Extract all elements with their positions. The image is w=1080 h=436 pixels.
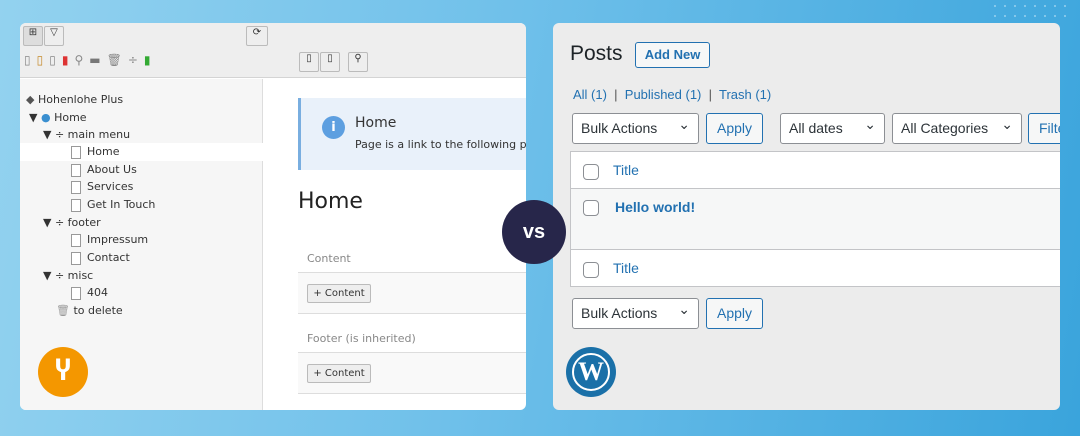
toolbar: ▯ xyxy=(327,53,333,64)
panel: TYPO3: Content xyxy=(307,252,351,265)
posts table xyxy=(570,151,1070,287)
panel: WordPress: All Categories xyxy=(901,120,988,136)
panel: WordPress: All (1) | Published (1) | Trash (1) xyxy=(573,87,771,102)
panel: WordPress xyxy=(553,23,1060,410)
tree area: ▼ ÷ footer xyxy=(43,216,101,229)
tree area: ▼ ÷ main menu xyxy=(43,128,130,141)
posts table: Title xyxy=(613,162,639,178)
info box: i xyxy=(331,120,336,135)
VS badge: vs xyxy=(523,221,545,243)
toolbar: ⟳ xyxy=(253,27,261,38)
toolbar xyxy=(20,23,526,78)
info box xyxy=(298,98,526,170)
panel: WordPress: Bulk Actions xyxy=(581,120,657,136)
tree area: About Us xyxy=(87,163,137,176)
panel: WordPress: Add New xyxy=(645,47,700,62)
tree area: Services xyxy=(87,180,133,193)
panel: TYPO3: + Content xyxy=(313,288,365,299)
panel: WordPress: Apply xyxy=(717,120,752,136)
panel: WordPress: Posts xyxy=(570,42,623,65)
icon: TYPO3 logo: Ⴤ xyxy=(55,357,71,387)
panel: TYPO3: Footer (is inherited) xyxy=(307,332,416,345)
panel: WordPress: Apply xyxy=(717,305,752,321)
info box: Home xyxy=(355,115,396,131)
toolbar: ▽ xyxy=(50,27,58,38)
icon: WordPress logo: W xyxy=(578,357,604,386)
tree area: Impressum xyxy=(87,233,148,246)
decorative dot grid top right xyxy=(994,5,1066,17)
tree area: ▼ ● Home xyxy=(29,111,87,124)
tree area: 🗑 to delete xyxy=(56,304,123,317)
tree area: Contact xyxy=(87,251,130,264)
tree area: Get In Touch xyxy=(87,198,155,211)
panel: WordPress: Bulk Actions xyxy=(581,305,657,321)
icon: WordPress logo xyxy=(566,347,616,397)
tree area: Home xyxy=(87,145,119,158)
panel: TYPO3 xyxy=(20,23,526,410)
tree area xyxy=(20,79,263,410)
heading Home: Home xyxy=(298,189,363,214)
posts table: Title xyxy=(613,260,639,276)
toolbar: ▯▯▯▮⚲▬🗑÷▮ xyxy=(24,53,156,67)
toolbar: ▯ xyxy=(306,53,312,64)
VS badge xyxy=(502,200,566,264)
posts table: Hello world! xyxy=(615,199,695,215)
icon: TYPO3 logo xyxy=(38,347,88,397)
tree area: ◆ Hohenlohe Plus xyxy=(26,93,123,106)
panel: TYPO3: + Content xyxy=(313,368,365,379)
tree area: ▼ ÷ misc xyxy=(43,269,93,282)
toolbar: ⚲ xyxy=(354,53,362,64)
toolbar: ⊞ xyxy=(29,27,37,38)
panel: WordPress: All dates xyxy=(789,120,843,136)
tree area: 404 xyxy=(87,286,108,299)
